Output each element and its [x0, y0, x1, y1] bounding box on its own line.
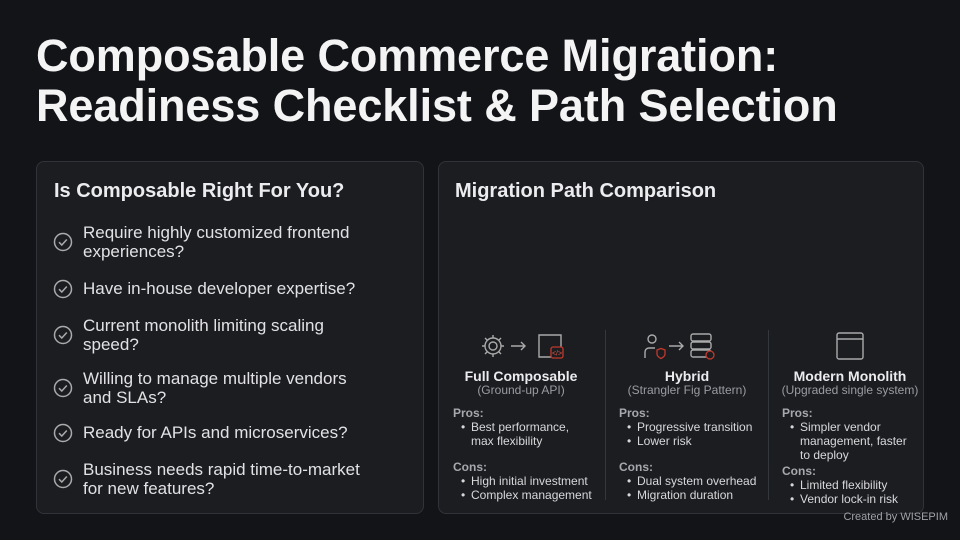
- column: hybrid: Dual system overhead: [637, 474, 756, 488]
- column: modern monolith: to deploy: [800, 448, 849, 462]
- column: hybrid: Lower risk: [637, 434, 692, 448]
- column: full composable: max flexibility: [471, 434, 542, 448]
- title: Readiness Checklist & Path Selection: [36, 80, 838, 131]
- heading: checklist: Is Composable Right For You?: [54, 180, 344, 202]
- title: Composable Commerce Migration:: [36, 30, 778, 81]
- column: full composable: High initial investment: [471, 474, 588, 488]
- column: full composable: (Ground-up API): [477, 383, 565, 397]
- item 6: Business needs rapid time-to-market for new features?: [83, 460, 360, 498]
- column: full composable: Complex management: [471, 488, 592, 502]
- item 3: Current monolith limiting scaling speed?: [83, 316, 324, 354]
- column: full composable: Best performance,: [471, 420, 569, 434]
- column: hybrid: Cons:: [619, 460, 653, 474]
- column: hybrid: Migration duration: [637, 488, 733, 502]
- column: modern monolith: Pros:: [782, 406, 813, 420]
- column: hybrid: (Strangler Fig Pattern): [628, 383, 746, 397]
- panel: checklist: [36, 161, 424, 514]
- item 4: Willing to manage multiple vendors and SLAs?: [83, 369, 347, 407]
- column: modern monolith: [782, 332, 918, 506]
- column: full composable: Pros:: [453, 406, 484, 420]
- icon: gear to code: </>: [552, 350, 562, 358]
- column: modern monolith: Vendor lock-in risk: [800, 492, 898, 506]
- icon: browser window: [836, 332, 864, 360]
- column: hybrid: Pros:: [619, 406, 650, 420]
- item 5: Ready for APIs and microservices?: [83, 423, 348, 442]
- column: hybrid: Hybrid: [665, 368, 709, 384]
- column: modern monolith: Simpler vendor: [800, 420, 881, 434]
- heading: migration: Migration Path Comparison: [455, 180, 716, 202]
- panel: migration paths: [438, 161, 924, 514]
- icon: gear to code: [482, 334, 564, 359]
- column: hybrid: Progressive transition: [637, 420, 752, 434]
- credit: Created by WISEPIM: [843, 511, 948, 523]
- icon: people to servers: [644, 333, 715, 360]
- column: full composable: Full Composable: [465, 368, 577, 384]
- item 1: Require highly customized frontend experiences?: [83, 223, 349, 261]
- column: modern monolith: Modern Monolith: [794, 368, 906, 384]
- column: modern monolith: Cons:: [782, 464, 816, 478]
- column: hybrid: [619, 333, 756, 502]
- column: full composable: [453, 334, 592, 502]
- column: modern monolith: Limited flexibility: [800, 478, 887, 492]
- title: [36, 30, 838, 131]
- column: full composable: Cons:: [453, 460, 487, 474]
- column: modern monolith: management, faster: [800, 434, 907, 448]
- item 2: Have in-house developer expertise?: [83, 279, 355, 298]
- column: modern monolith: (Upgraded single system): [782, 383, 918, 397]
